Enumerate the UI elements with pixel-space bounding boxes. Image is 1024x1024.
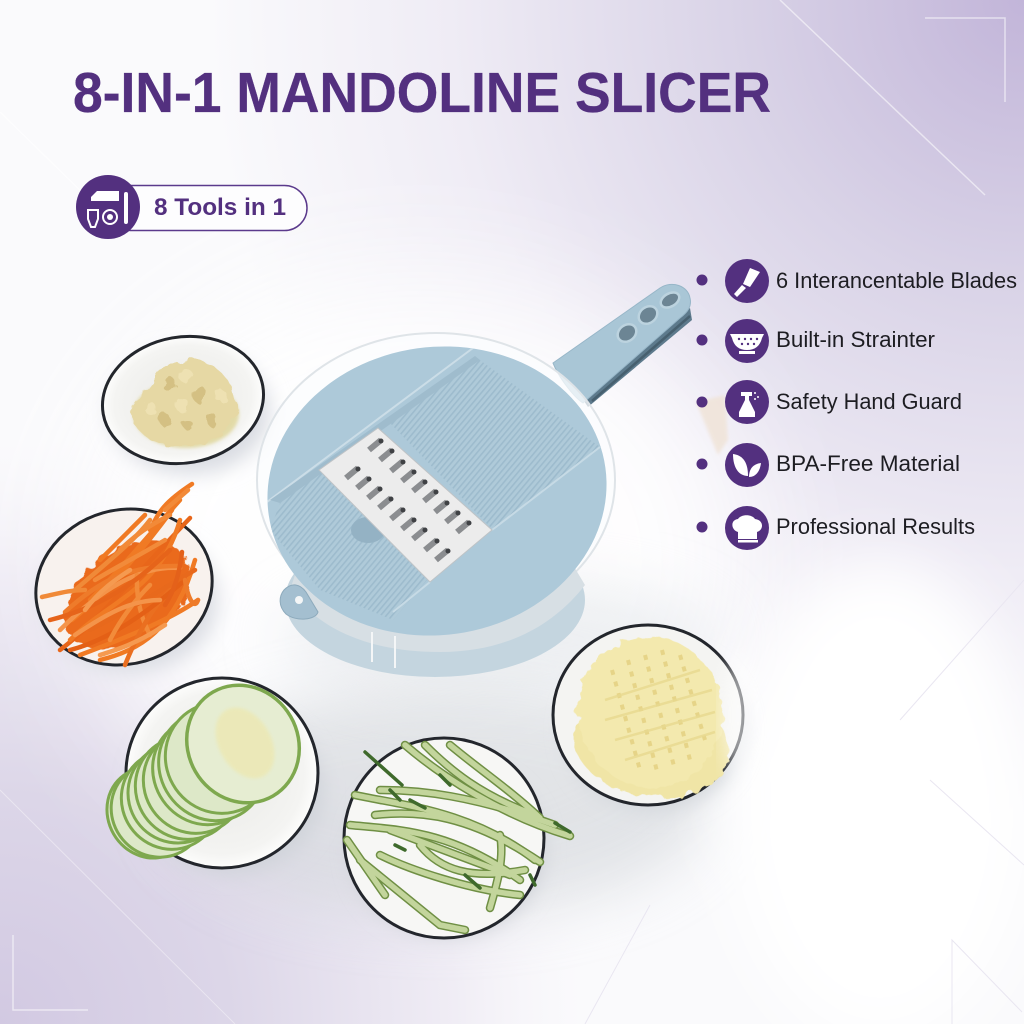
ribbed panels (390, 358, 600, 530)
feature: professional results (696, 506, 975, 550)
badge: 8 tools in 1 (76, 175, 307, 239)
feature list (696, 259, 1017, 550)
feature: 6 interchangeable blades: 6 Interancentable Blades (776, 268, 1017, 293)
clear bowl (257, 333, 615, 677)
lid hook (280, 585, 318, 619)
feature: strainer: Built-in Strainter (776, 327, 935, 352)
bowl: shredded carrot (17, 484, 231, 686)
bowl: cucumber sticks (344, 738, 570, 938)
feature: professional results: Professional Results (776, 514, 975, 539)
feature: BPA-free material (696, 443, 960, 487)
decorative wooden smudge (696, 395, 728, 455)
title: 8-IN-1 MANDOLINE SLICER (73, 61, 771, 125)
slicer product (249, 284, 692, 677)
feature: 6 interchangeable blades (696, 259, 1017, 303)
lid (268, 346, 606, 636)
bowl: waffle-cut potato (553, 621, 750, 810)
feature: safety hand guard (696, 380, 962, 424)
icon: tools (76, 175, 140, 239)
bowl: grated ginger (92, 324, 274, 476)
badge label: 8 Tools in 1 (154, 194, 286, 221)
feature: strainer (696, 319, 935, 363)
feature: BPA-free material: BPA-Free Material (776, 451, 960, 476)
feature: safety hand guard: Safety Hand Guard (776, 389, 962, 414)
metal grater plate (319, 428, 492, 582)
bowl: zucchini slices (91, 665, 322, 876)
handle (553, 284, 692, 407)
